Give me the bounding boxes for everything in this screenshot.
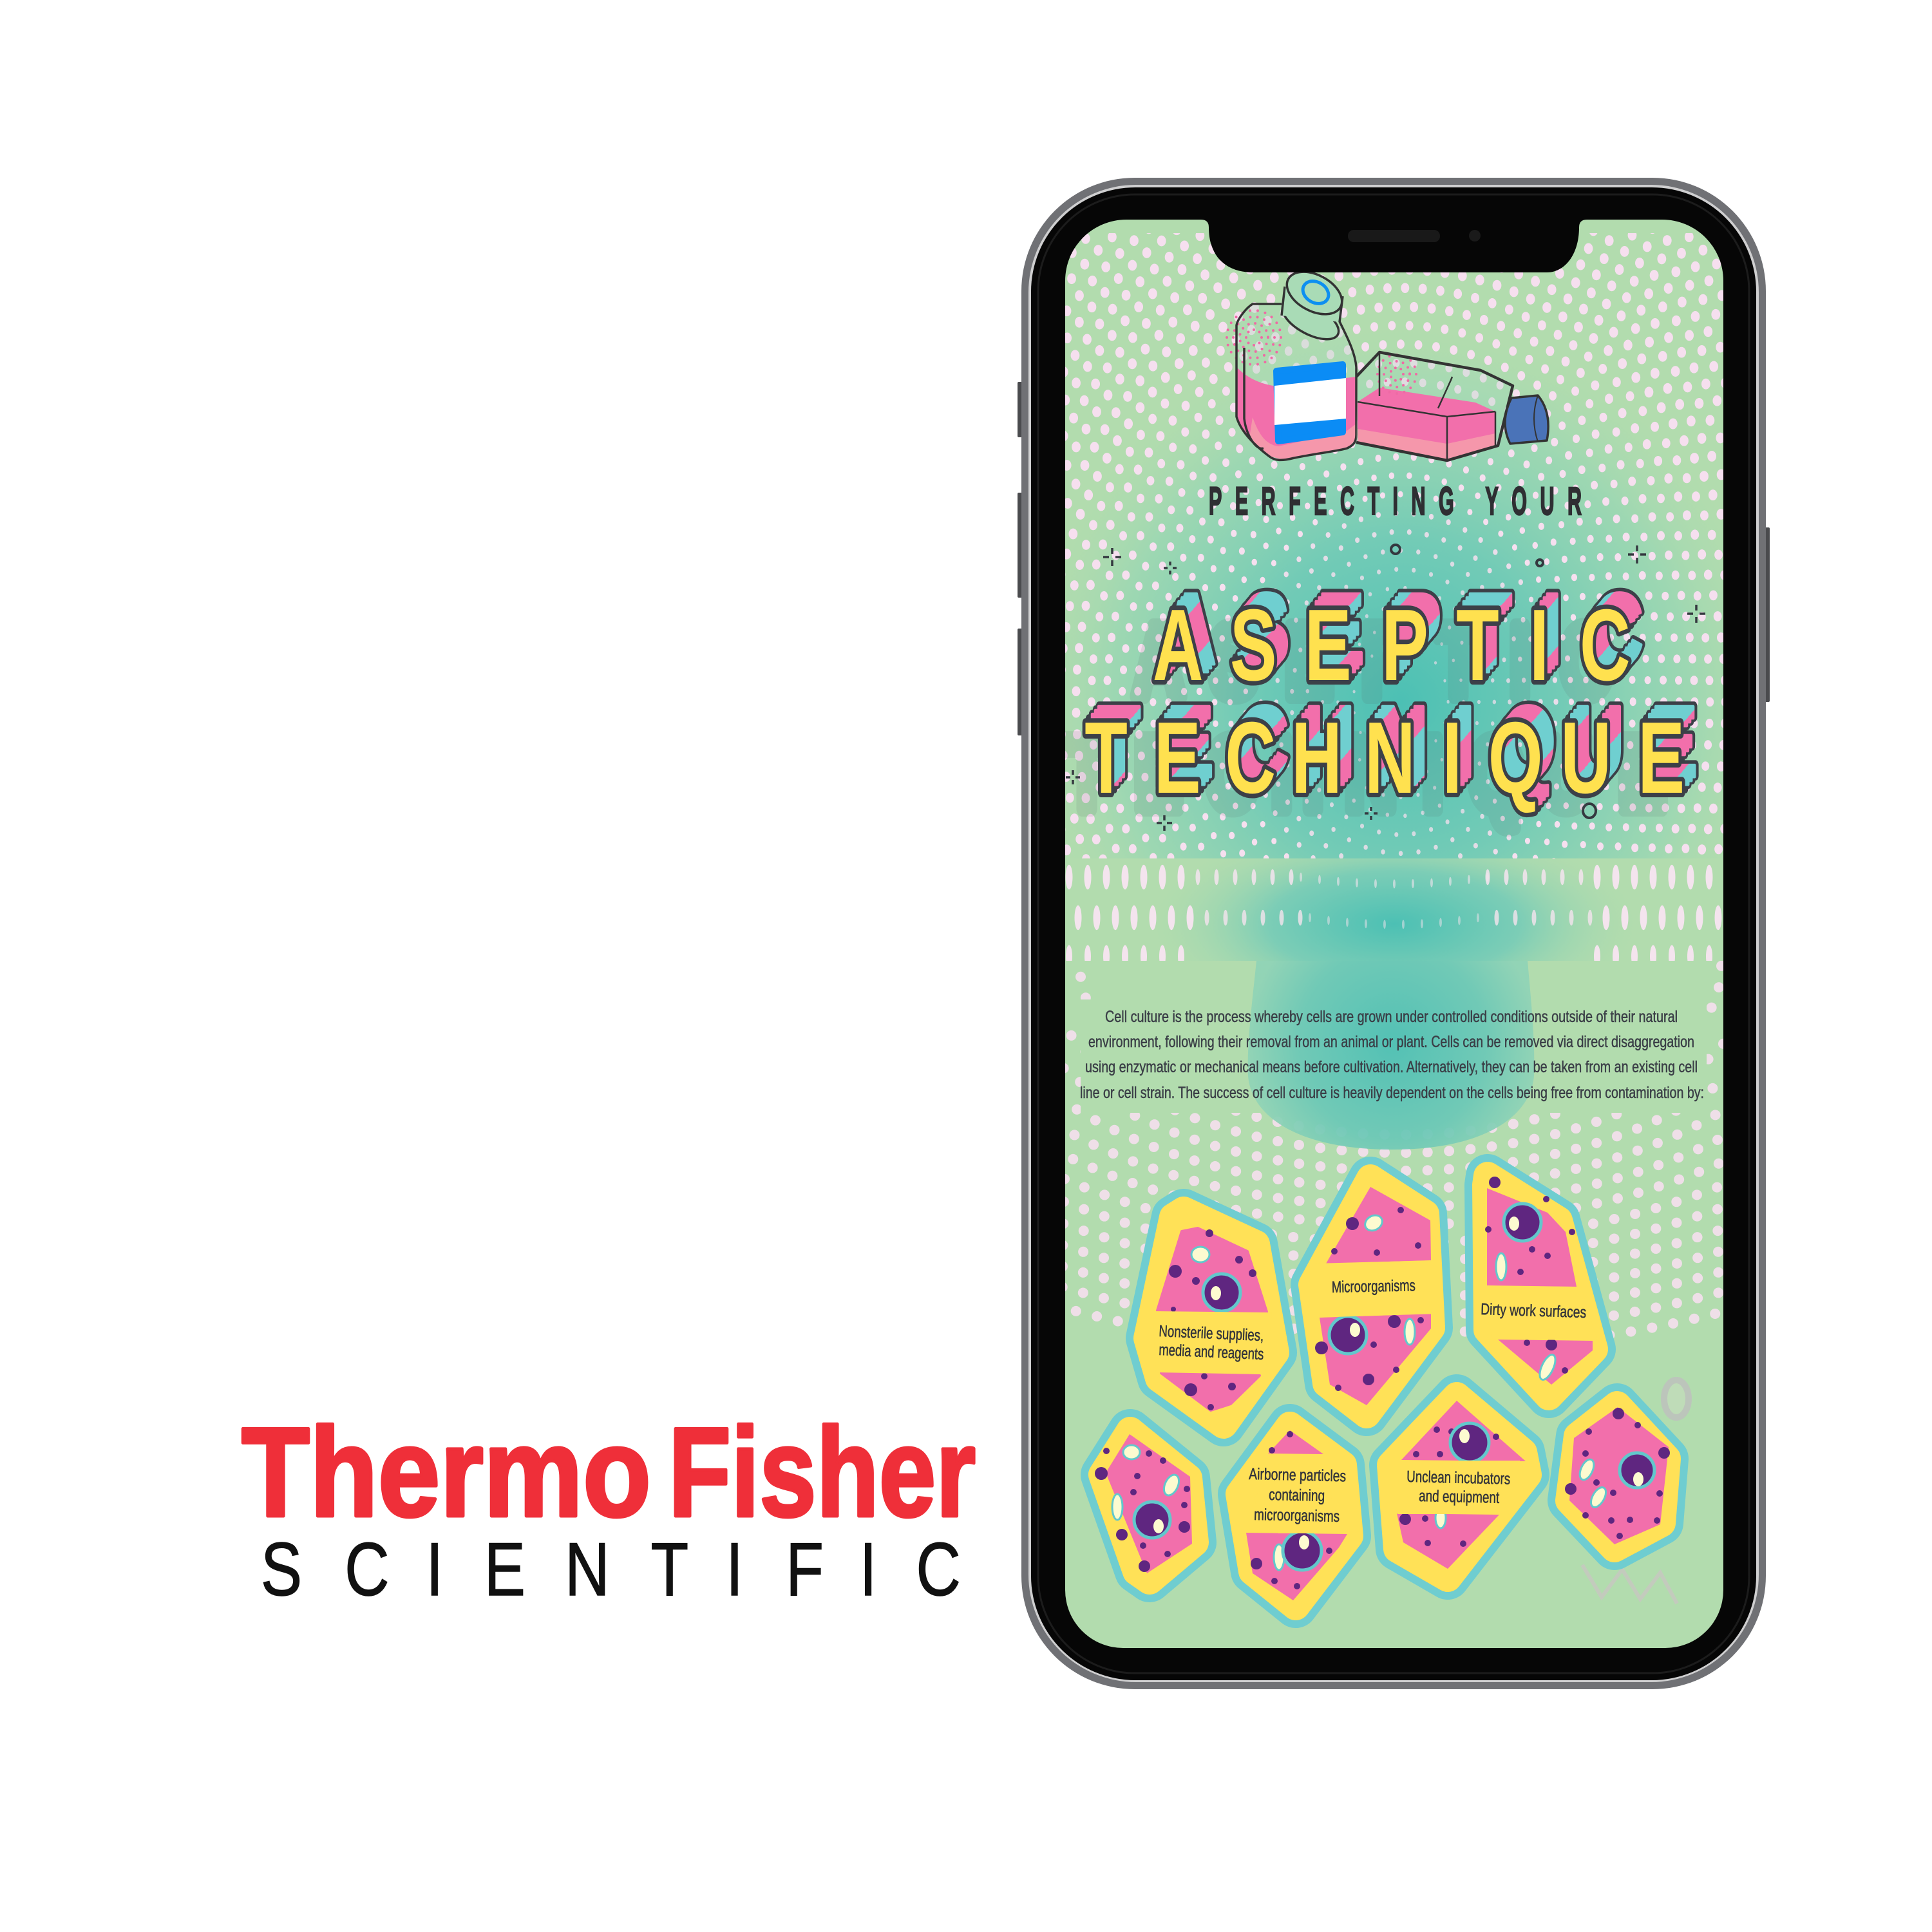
lying flask <box>1356 352 1548 460</box>
title extrusion: TECHNIQUE <box>1091 692 1691 806</box>
icon: culture flasks <box>1227 263 1548 460</box>
decorative grey zigzag <box>1582 1565 1677 1604</box>
cell: Unclean incubators <box>1391 1396 1528 1578</box>
cell: Nonsterile supplies <box>1148 1211 1275 1425</box>
cell label <box>1249 1465 1347 1526</box>
phone side buttons <box>1018 382 1770 735</box>
title extrusion: ASEPTIC <box>1166 572 1643 686</box>
cell label: microorganisms <box>1254 1506 1340 1526</box>
title extrusion: ASEPTIC <box>1159 580 1637 694</box>
teal glow behind title <box>1075 389 1723 858</box>
phone screen <box>1065 220 1723 1648</box>
organelles <box>1399 1423 1499 1547</box>
teal glow tent <box>1192 858 1597 961</box>
halftone dots: upper <box>1065 233 1723 858</box>
title extrusion: ASEPTIC <box>1159 580 1637 694</box>
body text: using enzymatic or mechanical means before cultivation. Alternatively, they can be taken from an existing cell <box>1085 1058 1698 1076</box>
flask label <box>1274 365 1346 441</box>
title extrusion: TECHNIQUE <box>1095 688 1695 802</box>
cell: bottom left <box>1095 1431 1195 1580</box>
title extrusion: TECHNIQUE <box>1088 697 1688 811</box>
phone body <box>1021 178 1766 1689</box>
logo wordmark: Thermo Fisher: Thermo <box>242 1401 651 1543</box>
title extrusion <box>1088 571 1698 811</box>
heading: Perfecting your: PERFECTING YOUR <box>1209 480 1582 524</box>
logo wordmark: Thermo Fisher: Fisher <box>668 1401 976 1543</box>
title extrusion: ASEPTIC <box>1156 584 1634 698</box>
cell label: Nonsterile supplies, <box>1159 1322 1264 1345</box>
cell label: containing <box>1269 1486 1325 1505</box>
cell label: Unclean incubators <box>1406 1468 1510 1488</box>
pink cytoplasm <box>1320 1187 1431 1405</box>
title shadow: ASEPTIC <box>1133 604 1611 718</box>
halftone dots: stretched band <box>1069 877 1723 956</box>
title shadow <box>1065 604 1665 831</box>
logo wordmark: Thermo Fisher <box>242 1401 976 1543</box>
phone notch speaker <box>1348 230 1440 242</box>
cell label: media and reagents <box>1159 1341 1264 1363</box>
pink cytoplasm <box>1487 1188 1593 1385</box>
organelles <box>1251 1431 1332 1589</box>
cell: Microorganisms <box>1312 1179 1437 1414</box>
teal blob behind body text <box>1248 961 1534 1150</box>
organelles <box>1095 1445 1190 1572</box>
phone mockup <box>1018 178 1770 1689</box>
title extrusion: ASEPTIC <box>1166 571 1644 685</box>
pink cytoplasm <box>1397 1401 1526 1569</box>
organelles <box>1565 1408 1670 1539</box>
title extrusion: TECHNIQUE <box>1098 684 1698 798</box>
organelles <box>1169 1229 1256 1410</box>
organelles <box>1485 1177 1575 1382</box>
title extrusion: ASEPTIC <box>1163 575 1641 689</box>
title extrusion: TECHNIQUE <box>1097 685 1698 799</box>
cell label: Airborne particles <box>1249 1465 1347 1485</box>
body text <box>1080 1008 1704 1102</box>
pink cytoplasm <box>1106 1434 1192 1573</box>
title front faces: TECHNIQUE <box>1084 701 1685 815</box>
logo subtitle: Scientific: SCIENTIFIC <box>261 1527 961 1611</box>
cell label <box>1406 1468 1510 1507</box>
title front faces <box>1084 588 1685 815</box>
title extrusion: TECHNIQUE <box>1091 692 1691 806</box>
cell label <box>1159 1322 1264 1363</box>
cell: bottom right <box>1565 1405 1670 1548</box>
decorative sparkles <box>1066 545 1705 831</box>
pink cytoplasm <box>1569 1407 1669 1544</box>
upright flask <box>1227 263 1356 460</box>
decorative grey ring <box>1664 1380 1689 1417</box>
organelles <box>1315 1207 1424 1391</box>
body text: Cell culture is the process whereby cells are grown under controlled conditions outside of their natural <box>1105 1008 1678 1026</box>
cell label: Dirty work surfaces <box>1481 1300 1587 1321</box>
flask cap ring <box>1301 279 1331 305</box>
logo: Thermo Fisher Scientific <box>242 1401 976 1611</box>
lying flask cap <box>1505 395 1548 444</box>
cell: Dirty work surfaces <box>1480 1176 1597 1396</box>
pink cytoplasm <box>1157 1228 1267 1410</box>
title extrusion: TECHNIQUE <box>1094 688 1694 802</box>
cell: Airborne particles <box>1240 1426 1349 1606</box>
halftone dots: lower <box>1065 961 1723 1338</box>
pink cytoplasm <box>1246 1430 1347 1600</box>
body text: environment, following their removal from an animal or plant. Cells can be removed via direct disaggregation <box>1088 1033 1694 1051</box>
title: Aseptic Technique <box>1065 571 1698 831</box>
title front faces: ASEPTIC <box>1153 588 1631 702</box>
cell label: and equipment <box>1419 1487 1500 1507</box>
title shadow: TECHNIQUE <box>1065 717 1665 831</box>
body text: line or cell strain. The success of cell culture is heavily dependent on the cells being free from contamination by: <box>1080 1084 1704 1102</box>
title extrusion: ASEPTIC <box>1162 576 1640 690</box>
cell label: Microorganisms <box>1332 1276 1416 1296</box>
phone notch camera <box>1469 230 1481 242</box>
